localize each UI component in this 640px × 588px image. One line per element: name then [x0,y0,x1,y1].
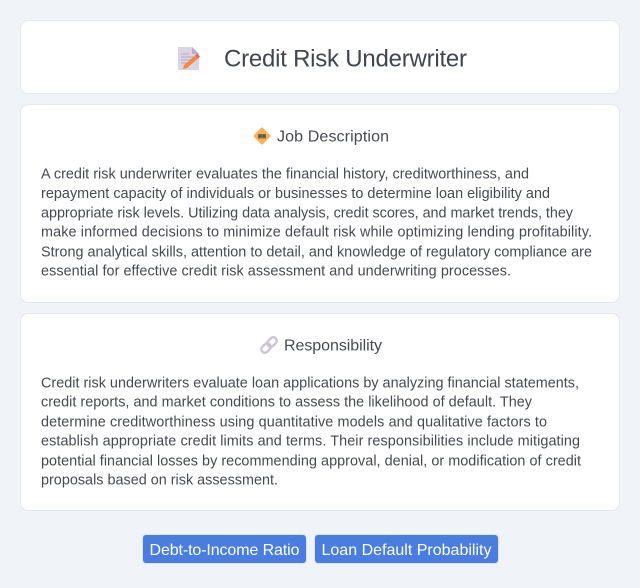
text block: job description: Strong analytical skills, attention to detail, and knowledge of regulatory compliance are [41,244,592,260]
tag: debt-to-income ratio [142,534,306,564]
text block: job description [41,166,592,280]
panel: responsibility [20,313,620,511]
tag: loan default probability [314,534,498,564]
panel: job description [20,104,620,303]
text block: responsibility: credit reports, and market conditions to assess the likelihood of default. They [41,394,533,410]
text block: job description: essential for effective credit risk assessment and underwriting processes. [41,264,511,280]
heading: job description: Job Description [277,128,389,146]
text block: job description: A credit risk underwriter evaluates the financial history, creditworthiness, and [41,166,529,182]
icon: orange diamond sign [254,128,270,144]
icon: chain link [260,336,278,354]
text block: responsibility: establish appropriate credit limits and terms. Their responsibilities include mitigating [41,434,580,450]
text block: responsibility: Credit risk underwriters evaluate loan applications by analyzing financial statements, [41,376,579,392]
text block: job description: appropriate risk levels. Utilizing data analysis, credit scores, and market trends, they [41,206,574,222]
title: Credit Risk Underwriter [224,46,467,72]
panel: title header [20,20,620,94]
text block: job description: repayment capacity of individuals or businesses to determine loan eligibility and [41,186,550,202]
tag: loan default probability: Loan Default Probability [321,542,491,559]
tag: debt-to-income ratio: Debt-to-Income Ratio [149,542,299,559]
text block: job description: make informed decisions to minimize default risk while optimizing lending profitability. [41,224,592,240]
heading: responsibility: Responsibility [284,338,382,354]
text block: responsibility: proposals based on risk assessment. [41,472,278,488]
icon: document with pencil [178,47,200,70]
text block: responsibility: determine creditworthiness using quantitative models and qualitative factors to [41,414,547,430]
text block: responsibility: potential financial losses by recommending approval, denial, or modification of credit [41,454,581,470]
